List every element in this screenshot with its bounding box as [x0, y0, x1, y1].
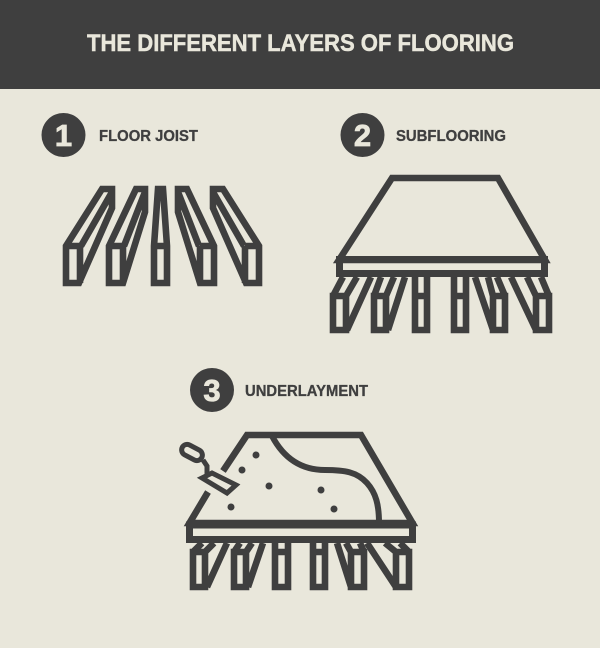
underlayment spread edge [272, 436, 379, 523]
heading: underlayment: UNDERLAYMENT [245, 383, 368, 400]
sand dots [228, 452, 338, 512]
panel: underlayment [180, 368, 412, 587]
number badge 1 [42, 113, 86, 157]
number badge 3 [190, 368, 234, 412]
panel: subflooring [333, 113, 549, 330]
title: THE DIFFERENT LAYERS OF FLOORING [87, 30, 514, 57]
illustration: subfloor panel on joists [333, 178, 549, 330]
number badge 3: 3 [203, 373, 221, 408]
heading: floor joist: FLOOR JOIST [99, 128, 198, 145]
heading: subflooring: SUBFLOORING [396, 128, 506, 145]
icon: trowel [180, 442, 236, 493]
number badge 2 [340, 113, 384, 157]
number badge 1: 1 [55, 118, 72, 153]
header banner [0, 0, 600, 89]
number badge 2: 2 [354, 118, 371, 153]
illustration: underlayment on subfloor and joists [190, 435, 412, 587]
illustration: five floor joists [66, 189, 259, 283]
panel: floor joist [42, 113, 259, 283]
